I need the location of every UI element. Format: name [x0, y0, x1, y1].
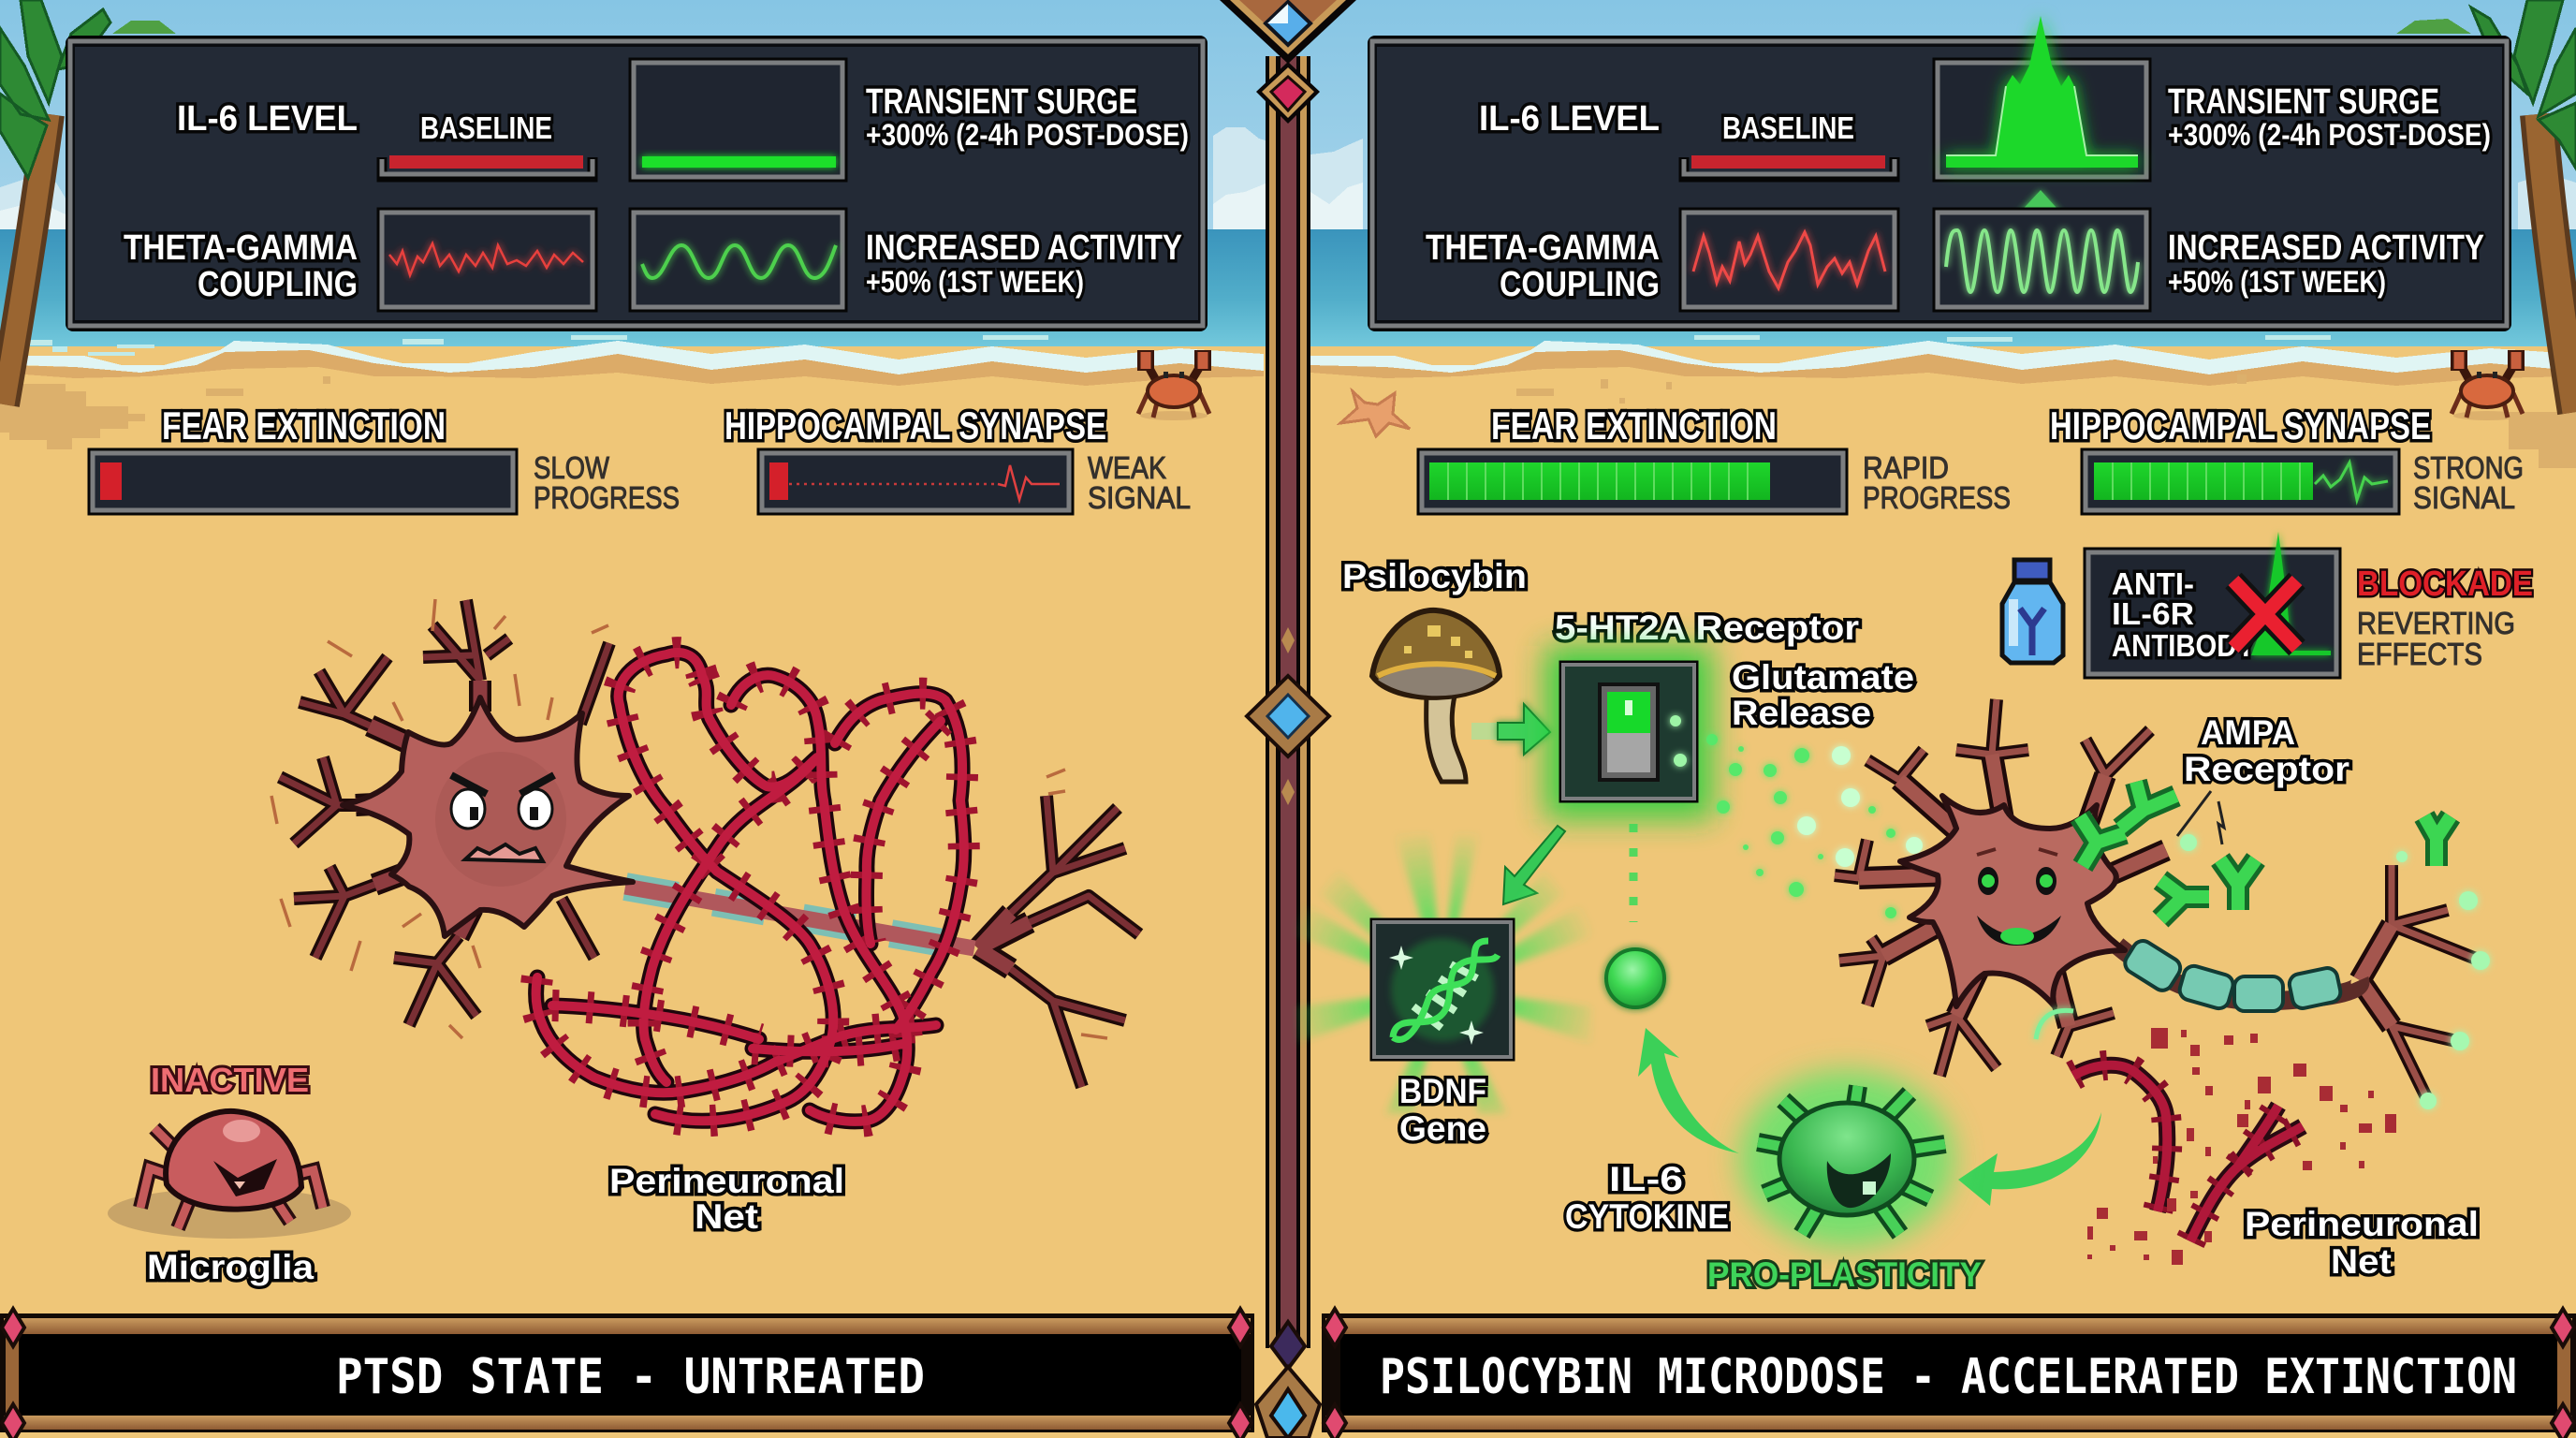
- label: glutamate release: Release: [1732, 694, 1871, 732]
- label: perineuronal net left: Net: [695, 1197, 758, 1236]
- chart: green theta wave: [634, 213, 842, 307]
- label: fear extinction left: FEAR EXTINCTION: [162, 404, 446, 448]
- chart: fear extinction slow bar: [93, 453, 513, 510]
- label: inactive: INACTIVE: [151, 1061, 309, 1099]
- panel: right biomarker monitor: [1368, 16, 2511, 331]
- label: perineuronal net right: [2245, 1205, 2479, 1281]
- diagram: healthy neuron: [1835, 699, 2490, 1109]
- label: BDNF gene: BDNF: [1399, 1072, 1486, 1110]
- chart: blocked green spike: [2251, 532, 2331, 655]
- label: 5-HT2A receptor: 5-HT2A Receptor: [1555, 609, 1859, 647]
- label: strong signal: [2413, 450, 2524, 515]
- label: antibody text: IL-6R: [2112, 596, 2194, 631]
- label: slow progress: PROGRESS: [534, 480, 680, 515]
- label: glutamate release: [1732, 658, 1914, 732]
- label: increased activity: INCREASED ACTIVITY: [2168, 228, 2484, 268]
- arrow: cytokine to orb: [1638, 1028, 1739, 1153]
- arrow: receptor to BDNF: [1503, 826, 1565, 904]
- label: antibody text: [2112, 566, 2255, 663]
- label: IL-6 level: IL-6 LEVEL: [177, 99, 358, 139]
- label: perineuronal net right: Net: [2331, 1242, 2392, 1281]
- chart: strong red trace: [1684, 213, 1895, 307]
- label: IL-6 cytokine: IL-6: [1609, 1160, 1683, 1198]
- label: surge value: +300% (2-4h POST-DOSE): [866, 118, 1189, 152]
- chart: transient surge box empty: [634, 63, 842, 177]
- icon: BDNF gene DNA: [1374, 922, 1511, 1057]
- label: theta-gamma: THETA-GAMMA: [124, 228, 358, 268]
- banner: psilocybin microdose accelerated extinction: [1322, 1313, 2576, 1432]
- chart: hippocampal strong signal bar: [2086, 453, 2395, 510]
- label: strong signal: STRONG: [2413, 450, 2524, 485]
- label: weak signal: WEAK: [1088, 450, 1166, 485]
- heading: PTSD state: PTSD STATE - UNTREATED: [336, 1349, 925, 1405]
- label: antibody text: ANTIBODY: [2112, 628, 2255, 663]
- label: perineuronal net left: [609, 1162, 844, 1236]
- label: weak signal: [1088, 450, 1191, 515]
- label: surge value: +300% (2-4h POST-DOSE): [2168, 118, 2491, 152]
- label: psilocybin: Psilocybin: [1342, 557, 1527, 595]
- diagram: broken perineuronal net: [2073, 1065, 2303, 1241]
- icon: happy face: [1977, 849, 2061, 946]
- diagram: thorny perineuronal net: [536, 653, 964, 1122]
- label: rapid progress: PROGRESS: [1863, 480, 2011, 515]
- label: baseline: BASELINE: [420, 110, 552, 145]
- icon: red X fill: [2233, 580, 2297, 648]
- label: BDNF gene: [1399, 1072, 1486, 1148]
- icon: left palm tree: [0, 0, 176, 404]
- icon: central ornate divider: [1220, 0, 1356, 1348]
- label: BDNF gene: Gene: [1399, 1109, 1486, 1148]
- diagram: stressed neuron: [271, 599, 1139, 1087]
- icon: myelin sheath segments: [2121, 937, 2342, 1011]
- label: IL-6 cytokine: [1565, 1160, 1729, 1236]
- label: pro-plasticity: PRO-PLASTICITY: [1707, 1255, 1982, 1294]
- label: increased activity: INCREASED ACTIVITY: [866, 228, 1182, 268]
- icon: glutamate particles: [1706, 734, 1923, 918]
- icon: red X: [2233, 580, 2297, 648]
- label: baseline: BASELINE: [1722, 110, 1854, 145]
- label: hippocampal synapse right: HIPPOCAMPAL SYNAPSE: [2050, 404, 2431, 448]
- label: activity value: +50% (1ST WEEK): [2168, 265, 2386, 299]
- label: blockade: BLOCKADE: [2357, 565, 2533, 604]
- label: microglia: Microglia: [147, 1248, 314, 1286]
- label: coupling: COUPLING: [198, 265, 358, 304]
- label: strong signal: SIGNAL: [2413, 480, 2515, 515]
- chart: baseline bar: [1684, 155, 1895, 177]
- label: rapid progress: [1863, 450, 2011, 515]
- icon: BDNF rays: [1296, 833, 1591, 1114]
- label: activity value: +50% (1ST WEEK): [866, 265, 1084, 299]
- label: coupling: COUPLING: [1500, 265, 1660, 304]
- label: AMPA receptor: [2184, 713, 2349, 788]
- icon: angry eyes and mouth: [451, 775, 554, 861]
- chart: fear extinction rapid bar: [1422, 453, 1843, 510]
- label: transient surge: TRANSIENT SURGE: [866, 82, 1137, 122]
- label: perineuronal net left: Perineuronal: [609, 1162, 844, 1200]
- icon: crab right: [2452, 350, 2523, 420]
- icon: green orb: [1606, 949, 1664, 1007]
- arrow: mushroom to receptor: [1471, 704, 1550, 755]
- label: slow progress: [534, 450, 680, 515]
- chart: baseline bar: [382, 155, 593, 177]
- chart: fast green gamma wave: [1938, 213, 2146, 307]
- label: reverting effects: EFFECTS: [2357, 637, 2482, 671]
- icon: net debris: [2087, 1028, 2396, 1265]
- icon: banner gems: [2, 1309, 2574, 1438]
- chart: transient surge spike: [1938, 16, 2146, 177]
- icon: crab left: [1138, 350, 1209, 420]
- label: AMPA receptor: Receptor: [2184, 750, 2349, 788]
- label: IL-6 level: IL-6 LEVEL: [1479, 99, 1660, 139]
- panel: left biomarker monitor: [66, 36, 1208, 331]
- icon: mushroom: [1372, 610, 1500, 782]
- label: reverting effects: REVERTING: [2357, 606, 2515, 640]
- banner: PTSD state untreated: [0, 1313, 1254, 1432]
- label: AMPA receptor: AMPA: [2201, 713, 2295, 752]
- icon: glowing tips: [2180, 834, 2490, 1109]
- label: IL-6 cytokine: CYTOKINE: [1565, 1197, 1729, 1236]
- chart: hippocampal weak signal bar: [762, 453, 1069, 510]
- label: hippocampal synapse left: HIPPOCAMPAL SYNAPSE: [724, 404, 1106, 448]
- panel: anti-IL-6R antibody: [2088, 532, 2336, 674]
- icon: inactive microglia: [108, 1111, 351, 1239]
- icon: right palm tree: [2396, 0, 2576, 412]
- label: antibody text: ANTI-: [2112, 566, 2194, 601]
- label: reverting effects: [2357, 606, 2515, 671]
- arrow: increase triangle: [2016, 190, 2064, 216]
- label: theta-gamma: THETA-GAMMA: [1426, 228, 1660, 268]
- label: slow progress: SLOW: [534, 450, 610, 485]
- label: perineuronal net right: Perineuronal: [2245, 1205, 2479, 1243]
- icon: pro-plasticity cytokine: [1739, 1070, 1954, 1248]
- label: glutamate release: Glutamate: [1732, 658, 1914, 697]
- arrow: net to cytokine: [1958, 1112, 2101, 1206]
- icon: dotted signal path: [1629, 824, 1638, 922]
- label: rapid progress: RAPID: [1863, 450, 1949, 485]
- chart: weak red trace: [382, 213, 593, 307]
- icon: receptor switch: [1544, 646, 1713, 819]
- label: fear extinction right: FEAR EXTINCTION: [1491, 404, 1777, 448]
- icon: AMPA receptors: [2080, 782, 2451, 919]
- icon: starfish: [1340, 391, 1410, 436]
- icon: antibody vial: [2002, 560, 2063, 663]
- label: weak signal: SIGNAL: [1088, 480, 1191, 515]
- label: transient surge: TRANSIENT SURGE: [2168, 82, 2439, 122]
